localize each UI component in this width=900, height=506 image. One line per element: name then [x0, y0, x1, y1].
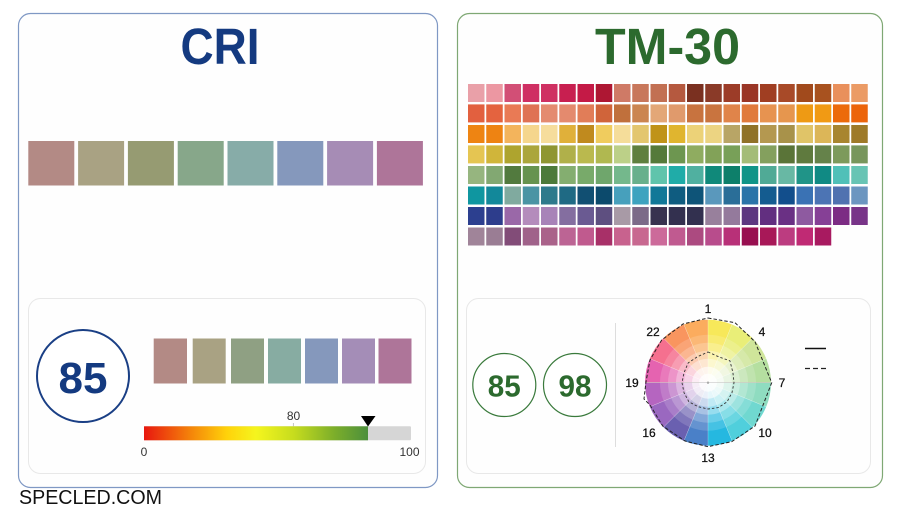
wheel hue labels: 16 [642, 426, 656, 440]
outer dashed test gamut [644, 318, 772, 447]
wheel hue labels: 19 [625, 376, 639, 390]
CRI colour samples strip [28, 141, 423, 186]
wheel hue labels: 7 [779, 376, 786, 390]
Rf score badge: 85 [488, 368, 521, 404]
TM-30 colour sample grid [468, 84, 868, 246]
colour vector wheel [644, 318, 772, 447]
panel: TM-30 score card [466, 298, 870, 474]
score gauge [141, 409, 420, 459]
wheel hue labels: 10 [758, 426, 772, 440]
Rg score badge [544, 354, 606, 416]
CRI score badge [37, 330, 129, 422]
grid row 4 [468, 145, 868, 163]
gauge label 0: 0 [141, 445, 148, 459]
CRI score badge: 85 [58, 354, 108, 403]
inner dashed reference gamut [682, 352, 734, 409]
gauge label 80: 80 [287, 409, 300, 423]
grid row 8 [468, 228, 831, 246]
wheel hue labels [625, 302, 786, 465]
grid row 5 [468, 166, 868, 184]
legend [805, 348, 826, 368]
panel: TM-30 [458, 14, 882, 488]
small colour samples [154, 338, 411, 384]
Rg score badge: 98 [558, 368, 592, 404]
heading: TM-30: TM-30 [595, 18, 740, 75]
gauge label 100: 100 [399, 445, 420, 459]
gauge marker [361, 416, 376, 426]
panel: CRI score card [28, 298, 426, 474]
grid row 3 [468, 125, 868, 143]
wheel hue labels: 22 [646, 325, 660, 339]
wheel hue labels: 4 [759, 325, 766, 339]
grid row 1 [468, 84, 868, 102]
grid row 7 [468, 207, 868, 225]
panel: CRI [18, 14, 438, 488]
wheel hue labels: 13 [701, 451, 715, 465]
heading: CRI: CRI [180, 18, 260, 75]
grid row 2 [468, 104, 868, 122]
grid row 6 [468, 186, 868, 204]
wheel hue labels: 1 [705, 302, 712, 316]
Rf score badge [473, 354, 536, 416]
